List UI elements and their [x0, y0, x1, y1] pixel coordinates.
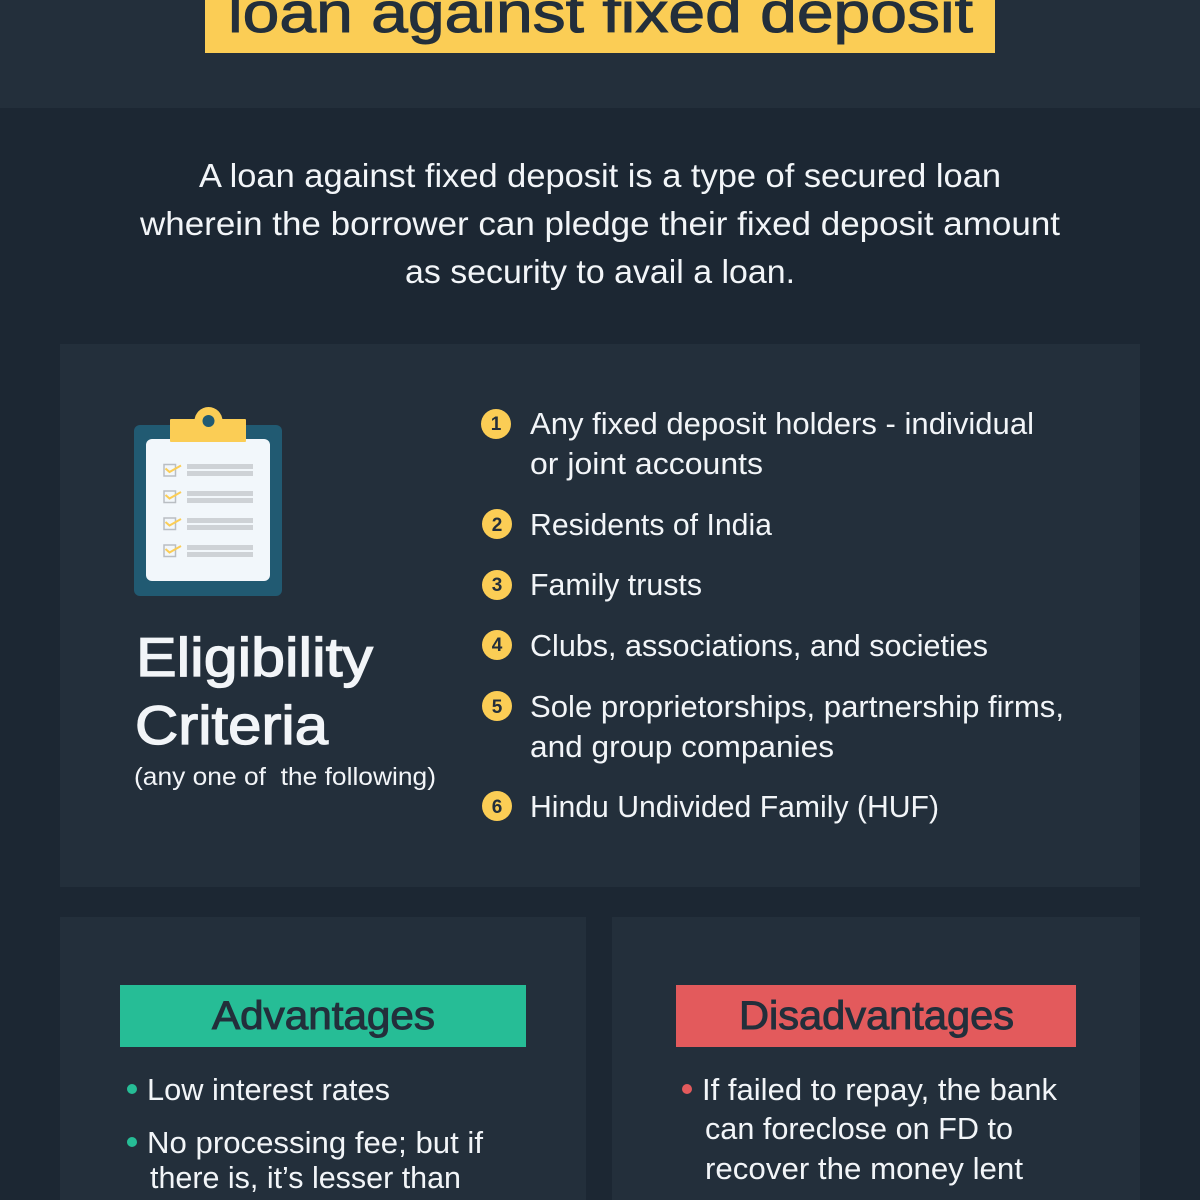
list item 6: Hindu Undivided Family (HUF) — [530, 789, 939, 824]
subheading: (any one of the following) — [134, 763, 436, 791]
disadvantage: foreclosure: If failed to repay, the bank — [702, 1072, 1057, 1107]
panel: disadvantages — [612, 917, 1140, 1200]
list item 1: or joint accounts — [530, 446, 763, 481]
list item 3: 3 — [492, 575, 502, 596]
disadvantage: foreclosure: can foreclose on FD to — [705, 1111, 1013, 1146]
intro text: wherein the borrower can pledge their fixed deposit amount — [139, 205, 1060, 242]
intro text: A loan against fixed deposit is a type of secured loan — [199, 157, 1001, 194]
heading: eligibility criteria: Criteria — [135, 694, 328, 756]
heading: disadvantages — [676, 985, 1076, 1047]
list item 1: 1 — [491, 414, 502, 435]
intro text: as security to avail a loan. — [405, 253, 795, 290]
heading: advantages — [120, 985, 526, 1047]
list item 5: and group companies — [530, 729, 834, 764]
title — [205, 0, 995, 53]
heading: eligibility criteria — [135, 626, 374, 756]
list item 1 — [481, 406, 1034, 481]
heading: disadvantages: Disadvantages — [739, 994, 1014, 1038]
list item 5: Sole proprietorships, partnership firms, — [530, 689, 1064, 724]
list item 1: Any fixed deposit holders - individual — [530, 406, 1034, 441]
advantage: no processing fee: there is, it’s lesser than — [150, 1160, 461, 1195]
disadvantage: foreclosure — [682, 1072, 1057, 1186]
list item 3: Family trusts — [530, 567, 702, 602]
advantage: low interest rates: Low interest rates — [147, 1072, 390, 1107]
list item 6: 6 — [492, 797, 502, 818]
heading: advantages: Advantages — [212, 994, 435, 1038]
heading: eligibility criteria: Eligibility — [136, 626, 374, 688]
advantage: no processing fee — [127, 1125, 483, 1195]
header band — [0, 0, 1200, 108]
panel: advantages — [60, 917, 586, 1200]
intro text — [139, 157, 1060, 290]
list item 4: Clubs, associations, and societies — [530, 628, 988, 663]
disadvantage: foreclosure: recover the money lent — [705, 1151, 1023, 1186]
list item 5 — [482, 689, 1064, 764]
advantage: no processing fee: No processing fee; but if — [147, 1125, 483, 1160]
list item 2: Residents of India — [530, 507, 773, 542]
panel: eligibility criteria — [60, 344, 1140, 887]
list item 4: 4 — [492, 635, 503, 656]
list item 5: 5 — [492, 697, 503, 718]
list item 2: 2 — [492, 515, 502, 536]
icon: clipboard checklist — [134, 407, 282, 596]
